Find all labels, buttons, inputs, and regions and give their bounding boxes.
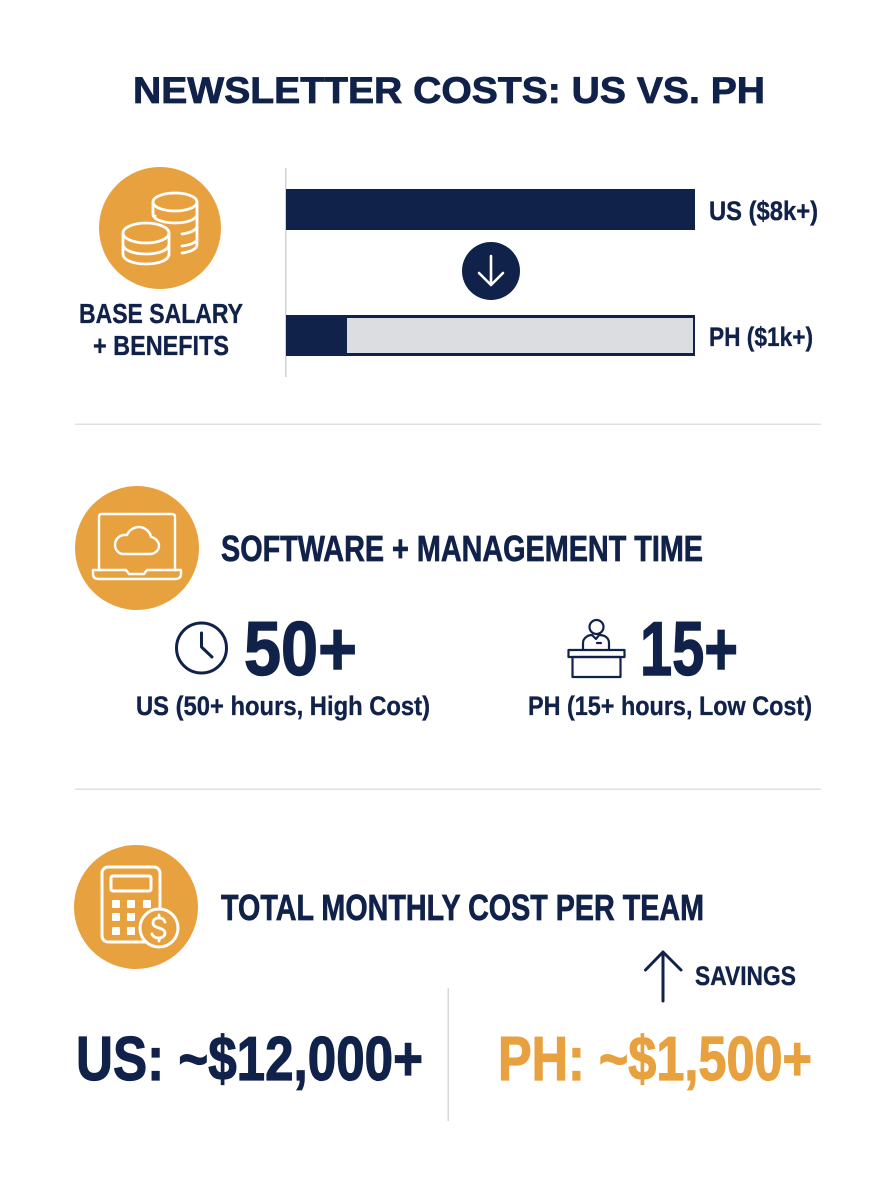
stat: PH hours: PH (15+ hours, Low Cost) bbox=[528, 691, 812, 721]
icon: laptop with cloud bbox=[75, 486, 199, 610]
icon: person at desk bbox=[568, 620, 624, 677]
bar chart: US vs PH salary bbox=[285, 168, 818, 377]
icon: up arrow bbox=[646, 952, 681, 1001]
icon: down arrow bbox=[462, 242, 520, 300]
total: PH: PH: ~$1,500+ bbox=[498, 1025, 812, 1094]
stat: PH hours bbox=[528, 607, 812, 721]
title: NEWSLETTER COSTS: US VS. PH bbox=[133, 70, 765, 111]
stat: US hours: US (50+ hours, High Cost) bbox=[136, 691, 430, 721]
icon: calculator with dollar bbox=[74, 845, 198, 969]
label: savings: SAVINGS bbox=[695, 961, 796, 991]
panel: base salary bbox=[79, 167, 818, 377]
icon: coins bbox=[99, 167, 221, 289]
label: US amount: US ($8k+) bbox=[709, 196, 818, 226]
stat: US hours: 50+ bbox=[244, 607, 357, 692]
bar: US bbox=[286, 189, 695, 230]
panel: software + management time bbox=[75, 486, 812, 721]
label: PH amount: PH ($1k+) bbox=[709, 322, 813, 352]
stat: US hours bbox=[136, 607, 430, 721]
label: base salary + benefits: BASE SALARY bbox=[79, 298, 243, 329]
bar: PH bbox=[286, 315, 695, 356]
icon: clock bbox=[176, 623, 226, 673]
label: base salary + benefits: + BENEFITS bbox=[93, 330, 229, 361]
heading: SOFTWARE + MANAGEMENT TIME bbox=[221, 528, 703, 569]
panel: total monthly cost bbox=[74, 845, 812, 1121]
heading: TOTAL MONTHLY COST PER TEAM bbox=[221, 887, 704, 928]
stat: PH hours: 15+ bbox=[640, 607, 738, 692]
total: US: US: ~$12,000+ bbox=[76, 1025, 423, 1094]
label: base salary + benefits bbox=[79, 298, 243, 361]
